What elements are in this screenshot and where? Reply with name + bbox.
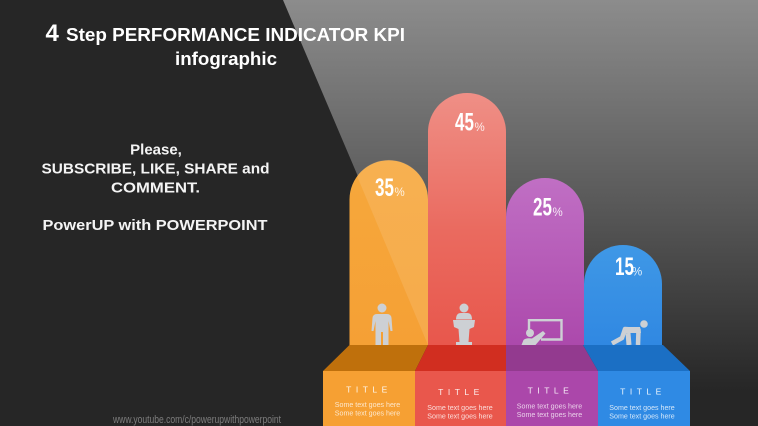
- body text: Some text goes here: [335, 410, 400, 418]
- title: 4: [46, 20, 60, 47]
- value 15%: [615, 253, 642, 281]
- value 35%: [375, 174, 405, 202]
- bar: red 45%: [428, 93, 506, 345]
- title: infographic: [175, 48, 277, 69]
- light wedge: [283, 0, 758, 426]
- floor: top surfaces: [323, 345, 690, 371]
- bar: orange 35%: [350, 160, 428, 345]
- value 45%: %: [474, 122, 485, 134]
- body text: [335, 401, 400, 418]
- value 35%: 35: [375, 174, 394, 202]
- value 45%: [455, 108, 485, 136]
- light overlay on orange bar: [357, 160, 428, 345]
- panel: blue step: [598, 371, 690, 426]
- value 25%: 25: [533, 193, 552, 221]
- body text: Some text goes here: [609, 412, 675, 420]
- title label: TITLE: [346, 384, 392, 394]
- icon: crouching runner: [612, 320, 648, 345]
- panel: red step: [415, 371, 506, 426]
- title: [46, 20, 405, 69]
- icon: presenter at board: [522, 320, 562, 345]
- body text: [427, 404, 493, 420]
- body text: [609, 404, 675, 420]
- value 35%: %: [394, 187, 405, 199]
- body text: Some text goes here: [609, 404, 675, 412]
- body text: Some text goes here: [427, 404, 493, 412]
- title label: TITLE: [438, 387, 484, 397]
- panel: orange step: [323, 371, 415, 426]
- bar: blue 15%: [584, 245, 662, 345]
- value 15%: 15: [615, 253, 634, 281]
- value 25%: [533, 193, 563, 221]
- body text: Some text goes here: [335, 401, 400, 409]
- call to action text: Please,: [130, 142, 182, 158]
- call to action text: [42, 142, 270, 234]
- call to action text: COMMENT.: [111, 180, 200, 196]
- bar: purple 25%: [506, 178, 584, 345]
- website url: www.youtube.com/c/powerupwithpowerpoint: [112, 414, 281, 426]
- body text: Some text goes here: [517, 411, 582, 419]
- title label: TITLE: [528, 386, 573, 396]
- value 45%: 45: [455, 108, 474, 136]
- title label: TITLE: [620, 386, 666, 396]
- body text: Some text goes here: [427, 412, 493, 420]
- panel: purple step: [506, 371, 598, 426]
- title: Step PERFORMANCE INDICATOR KPI: [66, 24, 405, 45]
- body text: Some text goes here: [517, 402, 582, 410]
- icon: speaker at podium: [453, 304, 475, 345]
- call to action text: SUBSCRIBE, LIKE, SHARE and: [42, 160, 270, 178]
- body text: [517, 402, 582, 419]
- call to action text: PowerUP with POWERPOINT: [42, 217, 268, 234]
- icon: standing person: [372, 304, 392, 345]
- value 15%: %: [632, 266, 642, 278]
- value 25%: %: [552, 207, 563, 219]
